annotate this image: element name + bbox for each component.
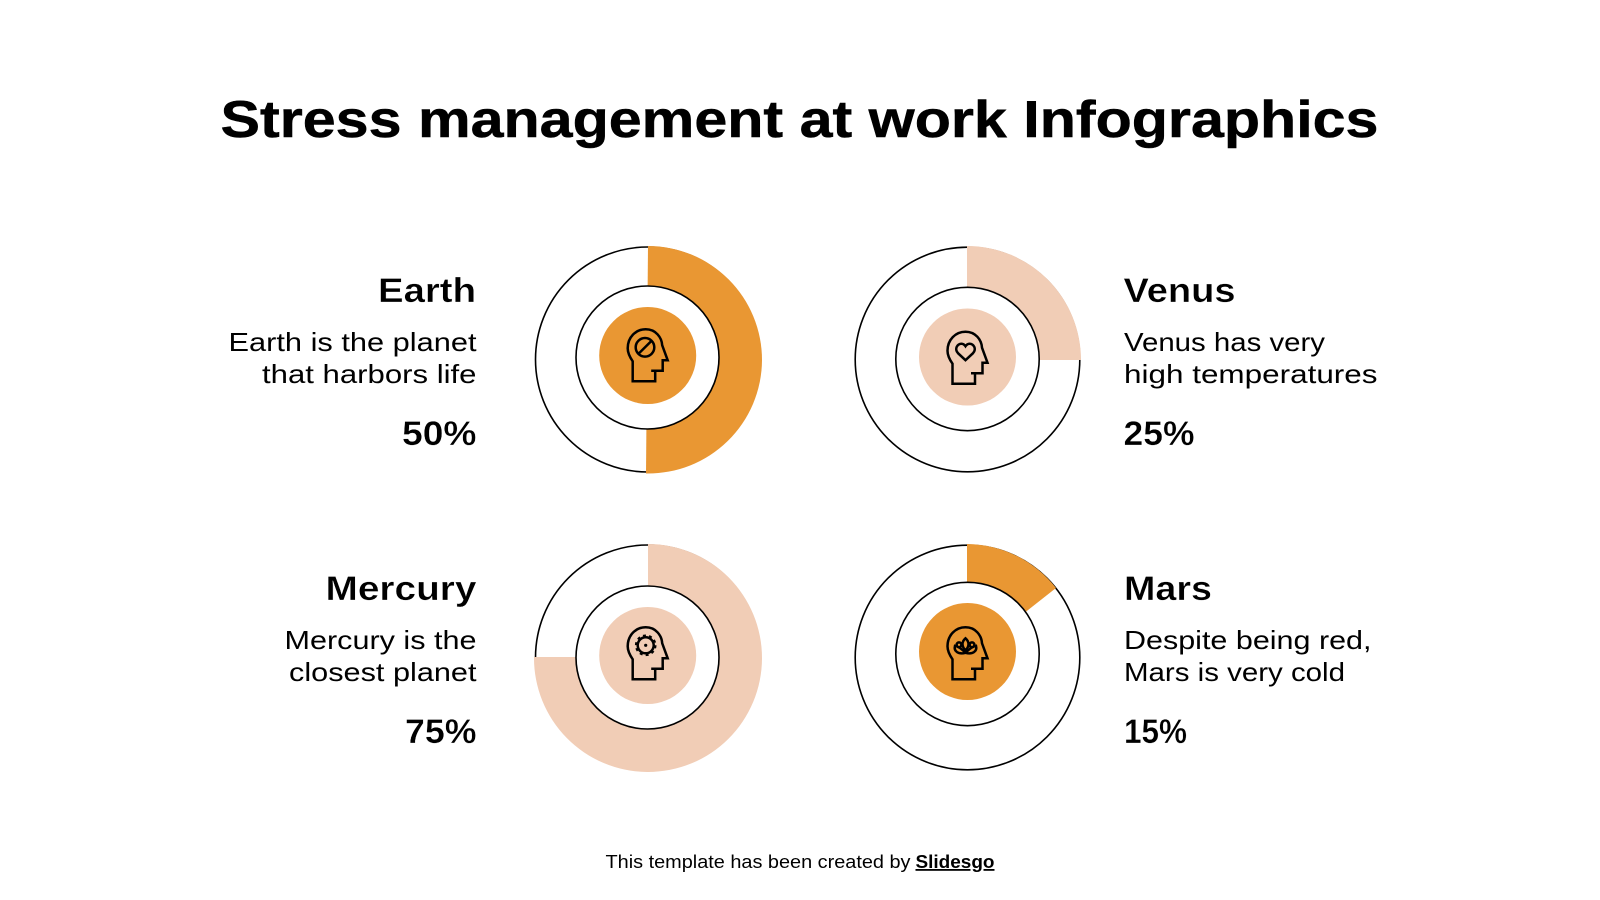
donut chart: Mars 15% — [855, 544, 1080, 770]
panel: Mercury — [284, 544, 762, 772]
text block: Mars description: Despite being red, — [1124, 625, 1372, 655]
panel: Mars — [855, 544, 1372, 770]
percentage: 15%: 15% — [1124, 713, 1187, 751]
text block: Earth description: Earth is the planet — [228, 327, 477, 357]
donut chart: Earth 50% — [536, 246, 762, 474]
text block: Venus description: high temperatures — [1124, 359, 1378, 389]
footer credit: This template has been created by — [606, 852, 910, 872]
percentage: 25%: 25% — [1124, 415, 1194, 453]
panel: Earth — [228, 246, 762, 474]
donut chart: Mercury 75% — [534, 544, 762, 772]
panel: Venus — [855, 246, 1378, 472]
heading: Earth: Earth — [378, 272, 476, 310]
donut chart: Venus 25% — [855, 246, 1081, 472]
percentage: 50%: 50% — [402, 415, 476, 453]
text block: Venus description — [1124, 327, 1378, 389]
heading: Mercury: Mercury — [326, 570, 477, 608]
text block: Mercury description: closest planet — [289, 657, 477, 687]
icon: head with heart — [948, 332, 988, 384]
heading: Mars: Mars — [1124, 570, 1212, 608]
heading: Venus: Venus — [1124, 272, 1236, 310]
icon: head with gear — [628, 627, 668, 679]
footer credit: Slidesgo — [916, 852, 995, 872]
text block: Mars description — [1124, 625, 1372, 687]
text block: Mercury description: Mercury is the — [284, 625, 476, 655]
icon: head with prohibition sign — [628, 329, 668, 381]
text block: Earth description — [228, 327, 477, 389]
text block: Mercury description — [284, 625, 477, 687]
text block: Earth description: that harbors life — [262, 359, 476, 389]
title: Stress management at work Infographics — [220, 91, 1378, 149]
percentage: 75%: 75% — [405, 713, 476, 751]
icon: head with lotus — [948, 627, 988, 679]
text block: Venus description: Venus has very — [1124, 327, 1325, 357]
text block: Mars description: Mars is very cold — [1124, 657, 1345, 687]
